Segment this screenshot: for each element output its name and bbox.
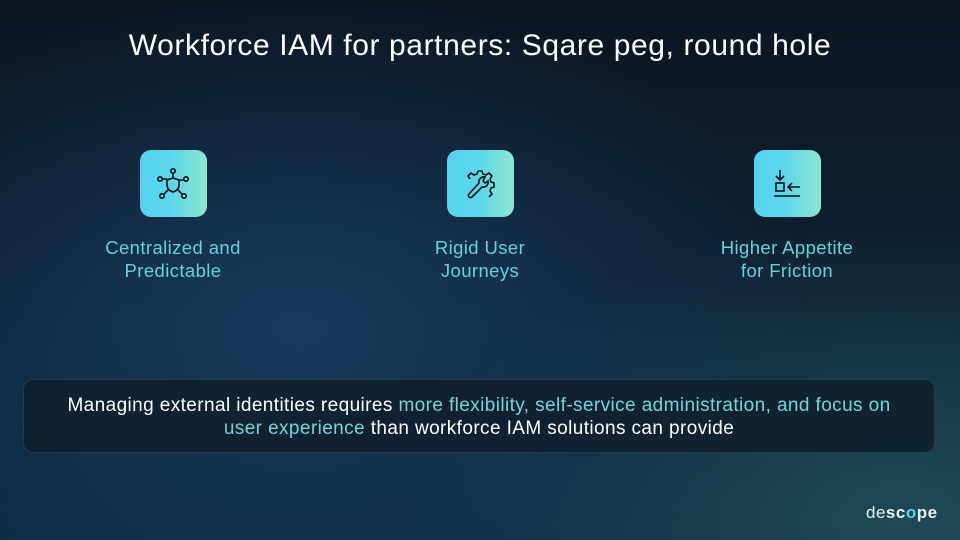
label (435, 237, 525, 281)
label: Higher Appetite (721, 237, 853, 258)
label: for Friction (741, 260, 833, 281)
label: Rigid User (435, 237, 525, 258)
title: Workforce IAM for partners: Sqare peg, round hole (129, 29, 831, 62)
icon: compress (754, 150, 820, 217)
item: rigid (435, 150, 525, 281)
label: Centralized and (105, 237, 241, 258)
item: friction (721, 150, 853, 281)
label: Journeys (441, 260, 519, 281)
callout box (23, 379, 935, 453)
label (105, 237, 241, 281)
label: Predictable (125, 260, 221, 281)
label (721, 237, 853, 281)
item: centralized (105, 150, 241, 281)
callout box: Managing external identities requires more flexibility, self-service administration, and focus on (67, 395, 891, 416)
logo: descope (866, 503, 938, 522)
callout box: user experience than workforce IAM solutions can provide (224, 418, 734, 439)
icon: network shield (140, 150, 206, 217)
icon: gear wrench (446, 150, 514, 217)
